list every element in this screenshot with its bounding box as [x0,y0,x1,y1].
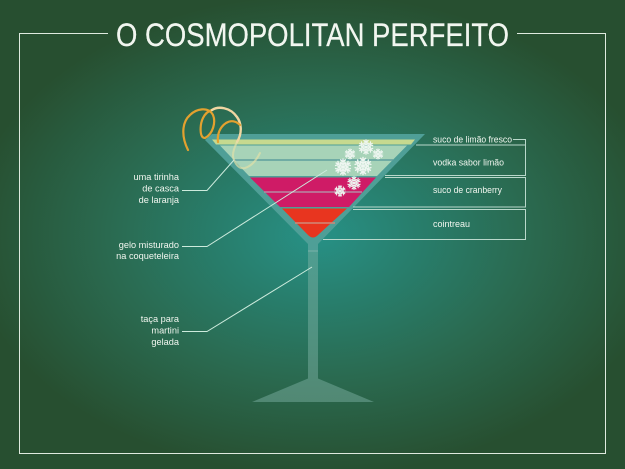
label: lemon juice: suco de limão fresco [433,134,512,144]
label: orange peel: uma tirinha [134,172,180,182]
icons: ice snowflakes [334,140,383,197]
leader lines: right side [323,140,526,240]
label: glass: taça para [141,314,180,324]
cocktail layer: cointreau [282,208,347,238]
label: glass: martini [151,326,179,336]
icon: martini glass [205,134,425,402]
label: glass: gelada [151,337,180,347]
cocktail layer: lemon juice [212,140,415,144]
glass bowl [205,134,425,252]
cocktail layer: vodka [220,146,407,176]
cocktail layer: cranberry [250,178,376,207]
leader lines: left side [182,160,327,332]
icon: orange peel [183,108,260,168]
label: vodka: vodka sabor limão [433,158,504,168]
label: cranberry: suco de cranberry [433,185,502,195]
label: orange peel: de casca [142,184,180,194]
label: ice: na coqueteleira [116,251,180,261]
title: O COSMOPOLITAN PERFEITO [116,17,509,53]
label: orange peel: de laranja [139,195,180,205]
label: ice: gelo misturado [119,240,179,250]
glass stem [252,250,374,402]
label: cointreau: cointreau [433,219,470,229]
